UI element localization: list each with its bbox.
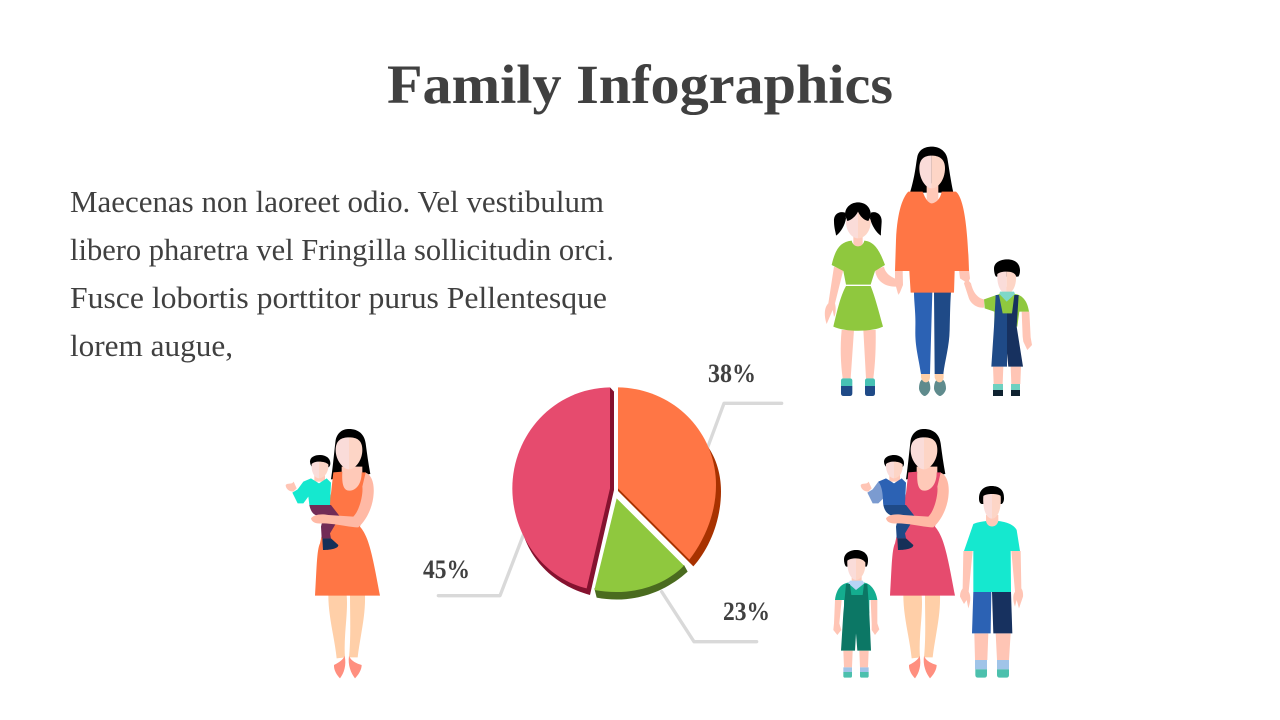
label: 45%: 45% [423,555,470,584]
baby in teal [286,455,340,550]
slice shadow: pink [520,387,614,595]
illustration: mother with baby, boy and teen [833,429,1023,678]
illustration: mother holding baby in orange dress [286,429,380,678]
label: 38%: 38% [708,359,756,388]
body text block: Fusce lobortis porttitor purus Pellentesque [70,280,607,315]
body text block [70,184,614,363]
body text block: libero pharetra vel Fringilla sollicitudin orci. [70,232,614,267]
title: Family Infographics [387,54,893,115]
figure: mother in orange coat [895,147,970,396]
label: 23%: 23% [723,597,770,626]
pie chart with leader lines [438,387,782,642]
leader line: 23% [662,592,757,642]
leader line: 45% [438,535,523,596]
figure: small boy in green overalls [833,550,879,678]
figure: boy in overalls [964,259,1032,396]
figure: mother in orange dress holding baby [286,429,380,678]
figure: teen boy in teal shirt [960,486,1023,678]
figure: girl in green dress [825,202,902,396]
slice: pink 45% [512,387,610,588]
slice shadow: green [594,565,688,600]
body text block: lorem augue, [70,328,233,363]
slice: green 23% [594,498,684,592]
leader line: 38% [707,403,782,448]
slice: orange 38% [618,387,716,560]
baby in blue [861,455,915,550]
body text block: Maecenas non laoreet odio. Vel vestibulum [70,184,604,219]
slice shadow: orange [618,445,721,566]
illustration: mother with girl and boy [825,147,1032,396]
figure: mother in pink dress holding baby [861,429,955,678]
